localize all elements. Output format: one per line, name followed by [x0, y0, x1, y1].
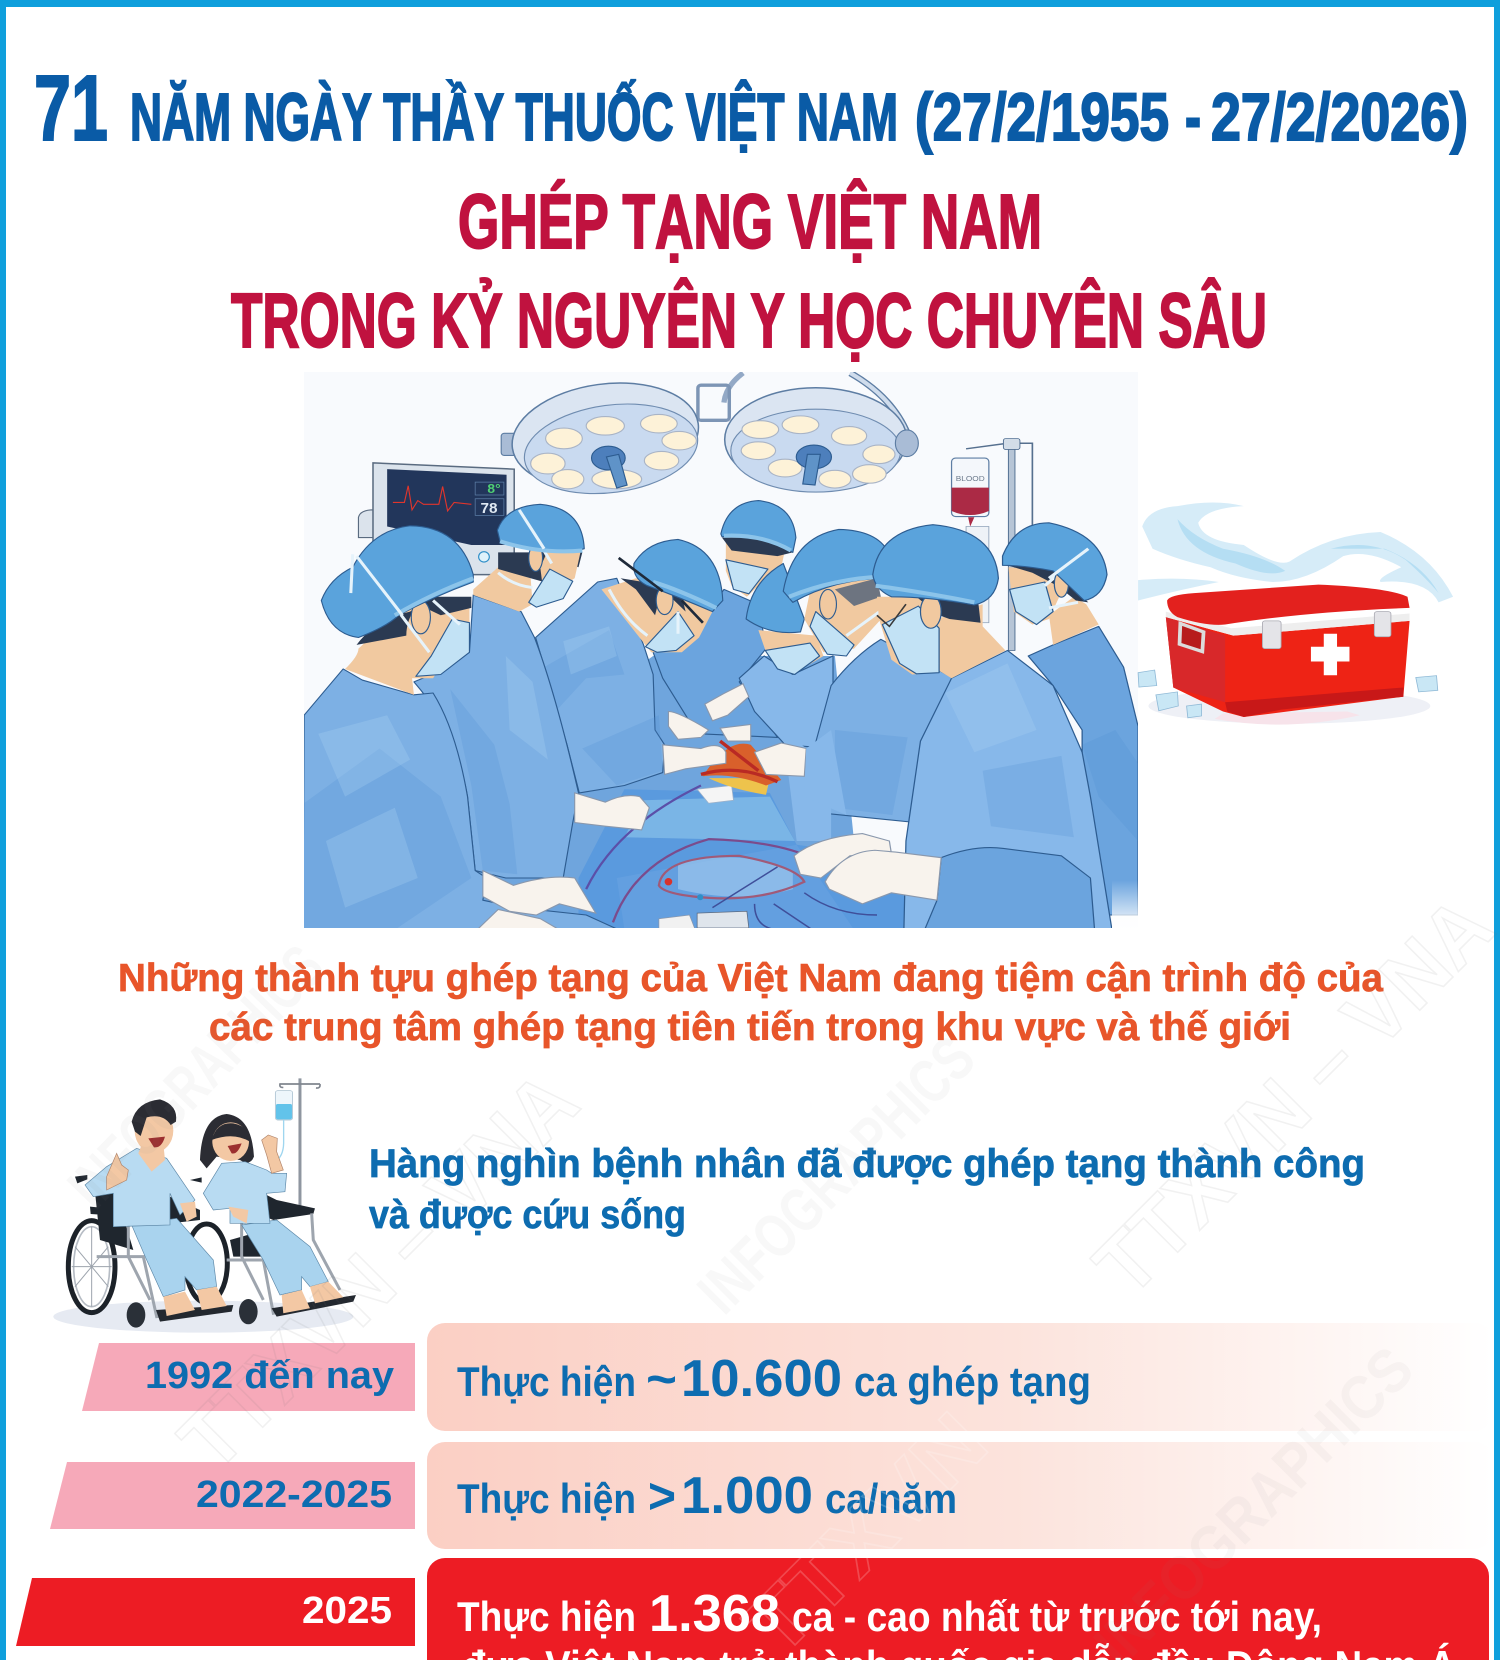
panel: about 10,600 transplants: Thực hiện: [457, 1358, 636, 1405]
icon: patient monitor: 78: [481, 500, 498, 517]
icon: right wheelchair: [186, 1177, 356, 1324]
heading: main title: GHÉP TẠNG VIỆT NAM: [458, 178, 1042, 265]
icon: patient monitor: 8°: [487, 481, 501, 496]
figure: organ and surgeons' hands: [663, 684, 846, 815]
label tag: 2025: [16, 1578, 415, 1646]
icon: patient monitor: [358, 463, 514, 575]
figure: gowns behind the team: [471, 656, 854, 930]
label tag: 2022-2025: 2022-2025: [196, 1474, 392, 1516]
subheading: orange statement: các trung tâm ghép tạng tiên tiến trong khu vực và thế giới: [209, 1006, 1291, 1049]
panel: over 1,000 per year: Thực hiện: [457, 1475, 636, 1522]
illustration: happy patients in wheelchairs: [53, 1078, 356, 1333]
title: anniversary line: -: [1185, 80, 1201, 155]
panel: over 1,000 per year: 1.000: [681, 1467, 813, 1525]
panel: about 10,600 transplants: ca ghép tạng: [854, 1358, 1091, 1405]
label tag: 1992 đến nay: 1992 đến nay: [145, 1355, 394, 1397]
panel: record 1,368 transplants: ca - cao nhất từ trước tới nay,: [792, 1593, 1322, 1640]
watermark: agency marks: [174, 906, 1498, 1646]
icon: IV drip stand: [275, 1078, 320, 1207]
label tag: 2025: 2025: [302, 1590, 392, 1632]
heading: main title: [231, 178, 1267, 364]
panel: over 1,000 per year: [427, 1442, 1493, 1549]
figure: central surgeon leaning over patient: [536, 539, 723, 793]
figure: surgeon with glasses right of centre: [783, 529, 954, 841]
label tag: 2022-2025: [50, 1462, 415, 1529]
panel: over 1,000 per year: >: [648, 1468, 676, 1524]
timeline row: 1992 to present: [82, 1323, 1493, 1431]
title: anniversary line: (27/2/1955: [915, 80, 1169, 155]
panel: over 1,000 per year: ca/năm: [825, 1475, 957, 1522]
timeline row: 2022-2025: [50, 1442, 1493, 1549]
panel: record 1,368 transplants: [427, 1558, 1489, 1660]
text: patients saved: [369, 1142, 1365, 1237]
figure: front right surgeon: [794, 525, 1112, 930]
subheading: orange statement: [118, 957, 1383, 1049]
text: patients saved: Hàng nghìn bệnh nhân đã được ghép tạng thành công: [369, 1142, 1365, 1186]
panel: about 10,600 transplants: 10.600: [681, 1350, 842, 1408]
panel: record 1,368 transplants: Thực hiện: [457, 1593, 636, 1640]
panel: about 10,600 transplants: [427, 1323, 1493, 1431]
icon: red organ transport cooler: [1138, 502, 1453, 725]
icon: cold mist waves: [1138, 502, 1453, 602]
watermark: agency marks: TTXVN – VNA: [161, 1054, 595, 1488]
figure: front left surgeon: [303, 526, 619, 930]
panel: record 1,368 transplants: 1.368: [649, 1585, 780, 1643]
figure: surgeon at back centre: [653, 501, 796, 737]
illustration: surgical team in operating room: [303, 372, 1138, 937]
title: anniversary line: [34, 56, 1468, 160]
watermark: agency marks: INFOGRAPHICS: [55, 933, 338, 1222]
icon: blood bag on IV pole: BLOOD: [956, 474, 985, 483]
title: anniversary line: NĂM NGÀY THẦY THUỐC VIỆT NAM: [130, 79, 898, 155]
text: patients saved: và được cứu sống: [369, 1193, 686, 1237]
figure: surgeon centre right small: [739, 564, 833, 748]
figure: operating table and drapes with tubes: [578, 784, 904, 928]
icon: operating lamps: [501, 372, 918, 504]
watermark: agency marks: INFOGRAPHICS: [685, 1024, 988, 1327]
panel: about 10,600 transplants: ~: [646, 1351, 677, 1407]
figure: surgeon far right: [1003, 523, 1138, 915]
icon: left wheelchair: [68, 1175, 233, 1328]
title: anniversary line: 71: [34, 56, 108, 160]
figure: surgeon second from left: [414, 504, 649, 878]
icon: blood bag on IV pole: [952, 438, 1032, 650]
timeline row: 2025: [16, 1558, 1489, 1660]
figure: male patient: [85, 1099, 227, 1316]
figure: female patient: [200, 1114, 343, 1313]
label tag: 1992 đến nay: [82, 1343, 415, 1411]
subheading: orange statement: Những thành tựu ghép tạng của Việt Nam đang tiệm cận trình độ của: [118, 957, 1383, 1000]
